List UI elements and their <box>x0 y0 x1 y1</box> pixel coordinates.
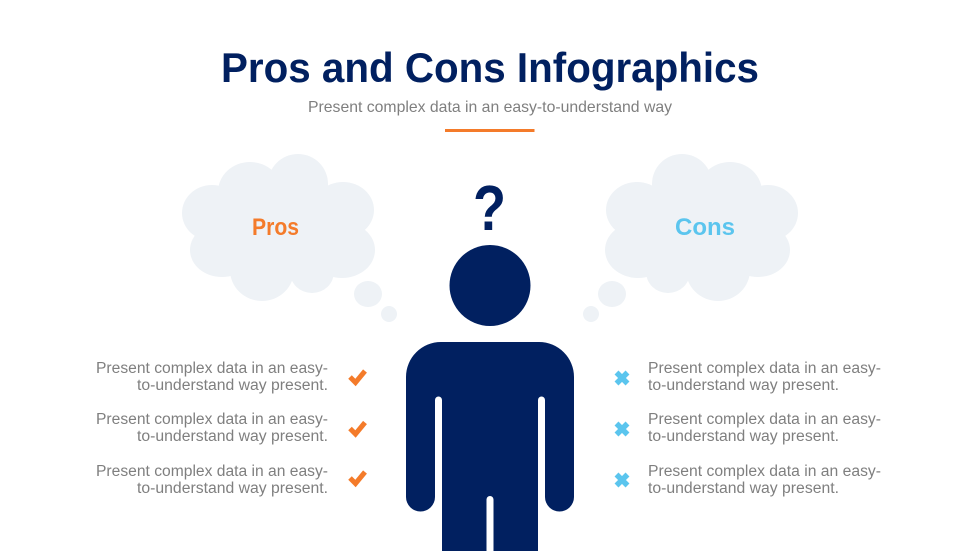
cons cloud shape <box>605 154 798 301</box>
pros thought bubbles <box>354 281 397 322</box>
pros item 2: to-understand way present. <box>137 428 328 445</box>
cons item 3: to-understand way present. <box>648 480 839 497</box>
icon: cross 1 <box>616 372 628 384</box>
person head <box>450 245 530 326</box>
person body <box>406 342 574 551</box>
cons item 2: to-understand way present. <box>648 428 839 445</box>
title: Pros and Cons Infographics <box>221 44 759 91</box>
pros item 1: Present complex data in an easy- <box>96 360 328 377</box>
icon: check 1 <box>350 371 365 382</box>
pros cloud shape <box>182 154 375 301</box>
pros item 2: Present complex data in an easy- <box>96 411 328 428</box>
pros label: Pros <box>252 214 299 241</box>
icon: cross 2 <box>616 424 628 434</box>
cons item 3 <box>648 463 881 497</box>
icon: check 3 <box>350 472 365 484</box>
panel: pros list <box>96 360 365 497</box>
panel: pros thought cloud <box>182 154 397 322</box>
cons item 2: Present complex data in an easy- <box>648 411 881 428</box>
cons item 1: to-understand way present. <box>648 377 839 394</box>
pros item 3 <box>96 463 328 497</box>
pros item 1: to-understand way present. <box>137 377 328 394</box>
panel: cons list <box>616 360 881 497</box>
pros item 2 <box>96 411 328 445</box>
cons item 3: Present complex data in an easy- <box>648 463 881 480</box>
cons thought bubbles <box>583 281 626 322</box>
cons label: Cons <box>675 214 735 241</box>
cons item 2 <box>648 411 881 445</box>
cons item 1: Present complex data in an easy- <box>648 360 881 377</box>
pros item 3: to-understand way present. <box>137 480 328 497</box>
pros item 3: Present complex data in an easy- <box>96 463 328 480</box>
icon: cross 3 <box>616 474 628 486</box>
icon: check 2 <box>350 422 365 434</box>
cons item 1 <box>648 360 881 394</box>
pros item 1 <box>96 360 328 394</box>
panel: cons thought cloud <box>583 154 798 322</box>
orange accent rule <box>445 129 534 132</box>
subtitle: Present complex data in an easy-to-understand way <box>308 99 672 116</box>
icon: question mark: ? <box>473 172 506 244</box>
icon: person figure <box>406 245 574 551</box>
